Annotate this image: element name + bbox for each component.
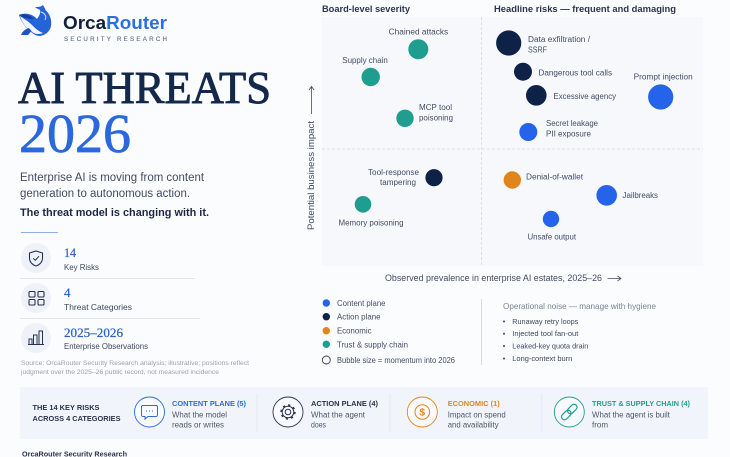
bubble: unsafe output: Unsafe output (528, 232, 577, 242)
bubble: denial-of-wallet: Denial-of-wallet (526, 172, 584, 182)
risk matrix (322, 17, 703, 266)
category: economic (407, 397, 506, 430)
operational noise list: Long-context burn (512, 354, 572, 363)
bubble: tool-response tampering: tampering (380, 178, 416, 187)
bubble: secret leakage PII exposure (519, 119, 599, 141)
category: content plane (134, 397, 246, 430)
stat: 2025-2026 enterprise observations (21, 323, 148, 353)
stat: 14 key risks: Key Risks (64, 262, 99, 272)
source note: Source: OrcaRouter Security Research analysis; illustrative; positions reflect (21, 360, 249, 367)
stat: 4 threat categories: 4 (64, 285, 71, 300)
bubble: unsafe output (528, 211, 577, 242)
bubble: memory poisoning (338, 196, 404, 228)
bubble: dangerous tool calls: Dangerous tool calls (538, 68, 612, 78)
category: content plane: What the model (172, 410, 227, 420)
category: trust and supply chain: What the agent is built (592, 410, 671, 420)
title: 2026 (19, 103, 131, 164)
logo: orca icon (19, 5, 51, 36)
x axis label and arrow: Observed prevalence in enterprise AI estates, 2025–26 (385, 273, 602, 283)
intro text: Enterprise AI is moving from content (20, 172, 205, 184)
bubble: supply chain (342, 56, 388, 86)
category: economic: ECONOMIC (1) (448, 399, 500, 408)
bubble: secret leakage PII exposure: Secret leakage (546, 119, 599, 128)
category: action plane: What the agent (311, 410, 366, 420)
category: trust and supply chain: from (592, 420, 608, 430)
bubble: data exfiltration: SSRF (528, 46, 547, 54)
bubble: secret leakage PII exposure: PII exposure (546, 130, 592, 138)
stat: 14 key risks: 14 (64, 245, 76, 260)
bubble: chained attacks: Chained attacks (389, 28, 448, 36)
stat: 2025-2026 enterprise observations: Enterprise Observations (64, 341, 148, 351)
bubble: tool-response tampering: Tool-response (368, 168, 420, 177)
source note: judgment over the 2025–26 public record, not measured incidence (20, 369, 220, 376)
band heading: ACROSS 4 CATEGORIES (32, 414, 121, 423)
bubble: prompt injection (634, 72, 693, 110)
category: action plane: ACTION PLANE (4) (311, 399, 378, 408)
bubble: MCP tool poisoning: MCP tool (419, 103, 452, 112)
category: trust and supply chain (554, 397, 690, 430)
category: economic: Impact on spend (448, 410, 506, 420)
quadrant headings (322, 4, 676, 15)
category: economic: $ (420, 408, 426, 418)
quadrant headings: Headline risks — frequent and damaging (494, 4, 676, 15)
bubble: tool-response tampering (368, 168, 443, 187)
title (18, 62, 271, 164)
bubble: denial-of-wallet (504, 171, 584, 189)
bubble: excessive agency (526, 85, 616, 106)
bubble: data exfiltration (496, 30, 591, 56)
bubble: supply chain: Supply chain (342, 56, 388, 65)
legend: Economic (337, 327, 372, 336)
category: action plane (273, 397, 378, 430)
category: economic: and availability (448, 420, 499, 430)
operational noise list: Runaway retry loops (512, 317, 579, 326)
bubble: data exfiltration: Data exfiltration / (528, 35, 591, 44)
intro text: The threat model is changing with it. (20, 207, 209, 219)
category: content plane: CONTENT PLANE (5) (172, 399, 246, 408)
operational noise list: Leaked-key quota drain (512, 342, 588, 351)
y axis label and arrow: Potential business impact (306, 120, 316, 230)
category band (20, 387, 708, 439)
stat: 2025-2026 enterprise observations: 2025–2026 (64, 325, 124, 340)
bubble: chained attacks (389, 28, 448, 59)
operational noise list (503, 302, 656, 363)
band heading (32, 403, 121, 423)
title: AI THREATS (18, 62, 271, 113)
logo wordmark: OrcaRouter (63, 12, 167, 33)
logo wordmark: SECURITY RESEARCH (64, 36, 167, 43)
category: trust and supply chain: TRUST & SUPPLY CHAIN (4) (592, 399, 690, 408)
category: action plane: does (311, 420, 326, 430)
bubble: memory poisoning: Memory poisoning (338, 218, 404, 228)
operational noise list: Injected tool fan-out (512, 329, 578, 338)
band heading: THE 14 KEY RISKS (32, 403, 100, 412)
legend: Action plane (337, 313, 381, 322)
bubble: excessive agency: Excessive agency (554, 92, 616, 101)
logo wordmark (63, 12, 167, 43)
quadrant headings: Board-level severity (322, 4, 411, 15)
legend: Bubble size = momentum into 2026 (337, 356, 456, 365)
category: content plane: reads or writes (172, 420, 224, 430)
stat: 4 threat categories: Threat Categories (64, 302, 132, 312)
legend: Trust & supply chain (337, 340, 408, 349)
intro text (20, 172, 209, 219)
bubble: MCP tool poisoning: poisoning (419, 114, 453, 122)
operational noise list: Operational noise — manage with hygiene (503, 302, 656, 311)
bubble: MCP tool poisoning (396, 103, 453, 127)
legend (322, 299, 456, 365)
bubble: prompt injection: Prompt injection (634, 72, 693, 82)
source note (20, 360, 249, 376)
intro text: generation to autonomous action. (20, 188, 190, 200)
stat: 14 key risks (21, 243, 99, 273)
bubble: dangerous tool calls (514, 63, 612, 81)
bubble: jailbreaks: Jailbreaks (622, 191, 658, 200)
bubble: jailbreaks (596, 185, 658, 206)
legend: Content plane (337, 299, 386, 308)
stat: 4 threat categories (21, 283, 132, 313)
